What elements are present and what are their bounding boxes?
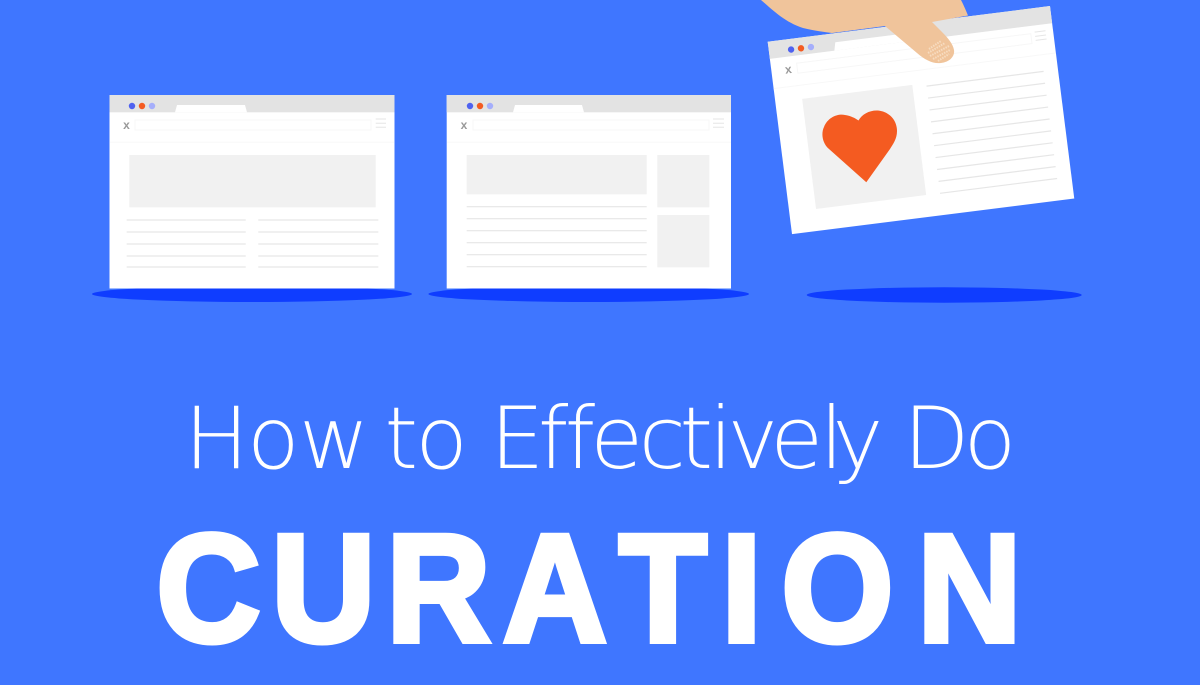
shadow: first window bbox=[92, 286, 412, 302]
menu icon bbox=[1035, 31, 1047, 40]
menu icon bbox=[376, 119, 386, 127]
panel: browser window one bbox=[110, 95, 394, 288]
browser dots bbox=[787, 43, 814, 53]
title: first line: Effectively bbox=[490, 389, 883, 489]
text lines bbox=[467, 207, 647, 267]
image placeholder bbox=[802, 85, 926, 209]
shadow: lifted window bbox=[807, 287, 1082, 303]
panel: lifted browser window bbox=[768, 6, 1074, 234]
main image placeholder bbox=[467, 155, 647, 194]
sidebar placeholder bottom bbox=[657, 215, 709, 267]
close icon: x bbox=[123, 118, 130, 132]
sidebar placeholder top bbox=[657, 155, 709, 207]
icon: hand holding window bbox=[761, 0, 968, 63]
title: first line: How bbox=[184, 389, 369, 489]
fingerprint bbox=[928, 41, 950, 61]
browser dots bbox=[467, 103, 493, 109]
close icon: x bbox=[784, 62, 793, 77]
icon: heart bbox=[822, 110, 897, 182]
menu icon bbox=[713, 119, 724, 127]
image placeholder bbox=[129, 155, 376, 207]
title: CURATION: CURATION bbox=[157, 504, 1021, 674]
title: first line bbox=[184, 389, 1016, 489]
panel: browser window two bbox=[447, 95, 731, 288]
text lines, right column bbox=[258, 220, 378, 267]
browser dots bbox=[129, 103, 155, 109]
shadow: second window bbox=[428, 286, 749, 302]
close icon: x bbox=[461, 118, 468, 132]
title: first line: to bbox=[384, 389, 468, 489]
text lines bbox=[927, 71, 1057, 193]
title: first line: Do bbox=[903, 389, 1016, 489]
text lines, left column bbox=[127, 220, 246, 267]
